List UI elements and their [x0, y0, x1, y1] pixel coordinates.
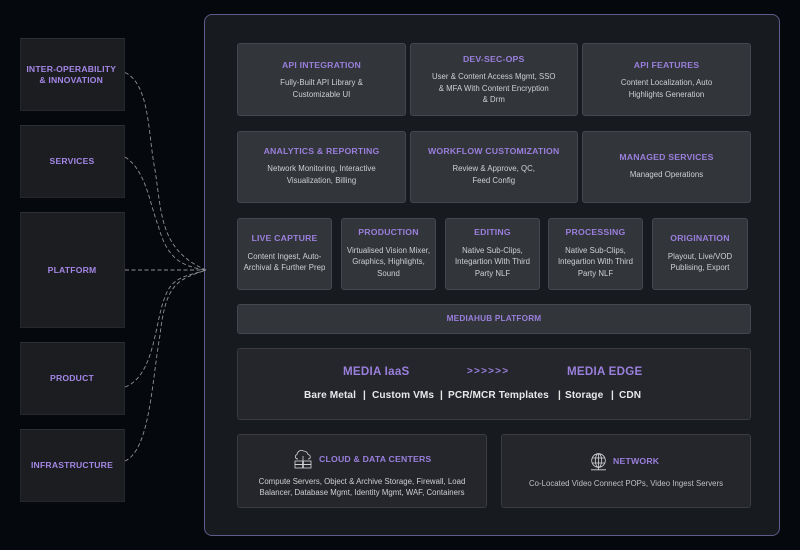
card: production: Virtualised Vision Mixer, [347, 246, 430, 254]
card: API integration: API INTEGRATION [282, 60, 361, 70]
card: live capture [237, 218, 332, 290]
text: service list: Storage [565, 390, 603, 401]
card: API integration: Customizable UI [293, 90, 350, 99]
card: managed services [582, 130, 751, 203]
card: API features [582, 42, 751, 116]
card: API integration [237, 42, 406, 116]
card: analytics: Visualization, Billing [287, 176, 356, 185]
icon: cloud with servers [294, 450, 312, 468]
card: analytics: Network Monitoring, Interactive [267, 164, 376, 173]
card: production: Sound [377, 268, 400, 278]
card: API integration: Fully-Built API Library & [280, 78, 363, 87]
card: workflow: Feed Config [472, 176, 515, 185]
category: infrastructure: INFRASTRUCTURE [31, 460, 113, 470]
card: origination [652, 218, 748, 290]
text: service list: | [558, 390, 561, 401]
text: network description: Co-Located Video Connect POPs, Video Ingest Servers [529, 478, 723, 488]
heading: network: NETWORK [613, 456, 659, 466]
card: production [341, 218, 436, 290]
panel: network [501, 434, 751, 508]
card: analytics [237, 130, 406, 203]
card: editing [445, 218, 540, 290]
category: inter-operability: & INNOVATION [39, 74, 103, 84]
card: workflow: Review & Approve, QC, [452, 164, 535, 173]
card: processing: PROCESSING [566, 227, 625, 237]
card: processing: Party NLF [578, 268, 613, 278]
bar: mediahub platform: MEDIAHUB PLATFORM [447, 314, 541, 322]
card: live capture: Content Ingest, Auto- [248, 252, 321, 260]
card: production: PRODUCTION [358, 227, 419, 237]
category: services [20, 125, 125, 198]
category: inter-operability [20, 38, 125, 111]
category: infrastructure [20, 429, 125, 502]
panel: cloud and data centers [237, 434, 487, 508]
category: inter-operability: INTER-OPERABILITY [26, 64, 116, 74]
card: managed services: Managed Operations [630, 170, 703, 179]
category: services: SERVICES [50, 156, 94, 166]
card: workflow [410, 130, 578, 203]
text: cloud description: Compute Servers, Object & Archive Storage, Firewall, Load [259, 476, 465, 486]
card: dev-sec-ops: & Drm [483, 95, 505, 104]
category: product: PRODUCT [50, 373, 94, 383]
card: API features: API FEATURES [634, 60, 699, 70]
text: service list: CDN [619, 390, 641, 401]
category: product [20, 342, 125, 415]
arrows: chevrons: >>>>>> [467, 366, 509, 376]
icon: globe [591, 453, 606, 470]
card: editing: Party NLF [475, 268, 510, 278]
panel: media iaas and edge [237, 348, 751, 420]
card: dev-sec-ops: User & Content Access Mgmt, SSO [432, 72, 556, 80]
heading: media iaas: MEDIA IaaS [343, 364, 410, 378]
card: live capture: LIVE CAPTURE [251, 233, 318, 243]
text: service list: Bare Metal [304, 390, 356, 401]
text: service list: | [611, 390, 614, 401]
card: processing: Integartion With Third [558, 257, 633, 266]
card: processing: Native Sub-Clips, [565, 246, 626, 254]
card: origination: Playout, Live/VOD [668, 252, 732, 260]
card: workflow: WORKFLOW CUSTOMIZATION [428, 146, 559, 156]
text: service list: PCR/MCR Templates [448, 390, 549, 401]
bar: mediahub platform [237, 304, 751, 334]
category: platform [20, 212, 125, 328]
card: API features: Content Localization, Auto [621, 78, 712, 87]
card: origination: ORIGINATION [670, 233, 730, 243]
card: dev-sec-ops: & MFA With Content Encryption [439, 84, 549, 92]
card: live capture: Archival & Further Prep [244, 263, 325, 272]
panel: cloud and data centers: Balancer, Database Mgmt, Identity Mgmt, WAF, Containers [259, 488, 465, 497]
card: origination: Publising, Export [670, 263, 730, 272]
card: analytics: ANALYTICS & REPORTING [264, 146, 379, 156]
panel: main architecture [204, 14, 780, 536]
card: API features: Highlights Generation [629, 90, 704, 99]
heading: media edge: MEDIA EDGE [567, 364, 643, 378]
text: service list: | [440, 390, 443, 401]
text: service list: | [363, 390, 366, 401]
card: dev-sec-ops: DEV-SEC-OPS [463, 54, 525, 64]
card: production: Graphics, Highlights, [352, 257, 425, 266]
text: service list [304, 390, 641, 401]
card: dev-sec-ops [410, 42, 578, 116]
text: service list: Custom VMs [372, 390, 434, 401]
category: platform: PLATFORM [48, 265, 96, 275]
heading: cloud and data centers: CLOUD & DATA CENTERS [319, 454, 431, 464]
card: managed services: MANAGED SERVICES [619, 152, 714, 162]
card: processing [548, 218, 643, 290]
card: editing: Integartion With Third [455, 257, 530, 266]
panel: left categories [20, 38, 125, 502]
card: editing: EDITING [474, 227, 511, 237]
card: editing: Native Sub-Clips, [462, 246, 523, 254]
